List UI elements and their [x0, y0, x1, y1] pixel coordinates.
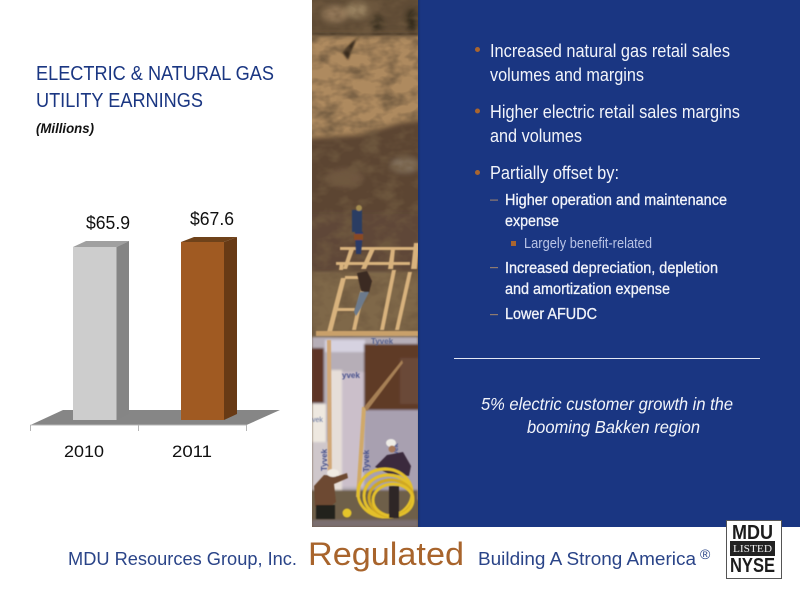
bar chart [30, 209, 280, 461]
bar: 2011 [181, 237, 237, 420]
sub-bullet: operation and maintenance: Higher operation and maintenance [505, 192, 727, 209]
photo strip: cliff and construction workers: Tyvek [371, 337, 394, 346]
sub-bullet: depreciation: and amortization expense [505, 281, 670, 298]
heading: chart title [36, 63, 274, 112]
bullet: natural gas [475, 41, 730, 85]
yellow hose coil [358, 469, 413, 517]
sub-bullet: operation and maintenance: expense [505, 213, 559, 230]
footer tagline: MDU Resources Group, Inc. [68, 549, 297, 569]
footer tagline: Building A Strong America [478, 549, 697, 569]
framing [316, 243, 419, 336]
bar: 2010 [73, 241, 129, 420]
footer tagline: ® [700, 546, 711, 562]
axis label: 2010: 2010 [64, 442, 104, 461]
building with Tyvek wrap [312, 337, 419, 527]
sub-bullet: depreciation: Increased depreciation, depletion [505, 260, 718, 277]
bullet: partially offset: Partially offset by: [490, 163, 619, 183]
text: units: (Millions) [36, 120, 94, 136]
callout: customer growth [481, 394, 733, 437]
bullet list [475, 41, 740, 323]
logo: MDU listed NYSE: NYSE [730, 555, 775, 577]
panel: blue bullet background [418, 0, 800, 527]
photo strip: cliff and construction workers: vek [312, 417, 323, 424]
sub-bullet: AFUDC: Lower AFUDC [505, 306, 597, 323]
heading: chart title: UTILITY EARNINGS [36, 90, 203, 112]
footer tagline [68, 536, 711, 572]
photo strip: cliff and construction workers: Tyvek [320, 448, 329, 471]
footer tagline: Regulated [308, 536, 464, 572]
value label: 2010: $65.9 [86, 213, 130, 233]
worker with hose [375, 452, 411, 476]
logo: MDU listed NYSE: LISTED [733, 543, 772, 555]
bullet: natural gas: Increased natural gas retail sales [490, 41, 730, 61]
photo strip: cliff and construction workers: yvek [342, 371, 360, 380]
photo strip: cliff and construction workers [312, 0, 418, 527]
rock texture [312, 0, 418, 338]
logo: MDU listed NYSE: MDU [732, 522, 773, 544]
bullet: natural gas: volumes and margins [490, 65, 644, 85]
bullet: electric [475, 102, 740, 146]
sub-sub-bullet: benefit-related: Largely benefit-related [524, 236, 652, 252]
callout: customer growth: booming Bakken region [527, 417, 700, 437]
logo: MDU listed NYSE [726, 520, 782, 578]
worker figures on framing [352, 205, 372, 316]
sub-bullet: operation and maintenance [490, 192, 727, 230]
bullet: electric: Higher electric retail sales margins [490, 102, 740, 122]
axis label: 2011: 2011 [172, 442, 212, 461]
heading: chart title: ELECTRIC & NATURAL GAS [36, 63, 274, 85]
sub-bullet: depreciation [490, 260, 718, 298]
bullet: electric: and volumes [490, 126, 582, 146]
value label: 2011: $67.6 [190, 209, 234, 229]
worker crouching [314, 473, 348, 507]
photo strip: cliff and construction workers: vek [393, 443, 400, 455]
callout: customer growth: 5% electric customer growth in the [481, 394, 733, 414]
photo strip: cliff and construction workers: Tyvek [362, 449, 371, 472]
